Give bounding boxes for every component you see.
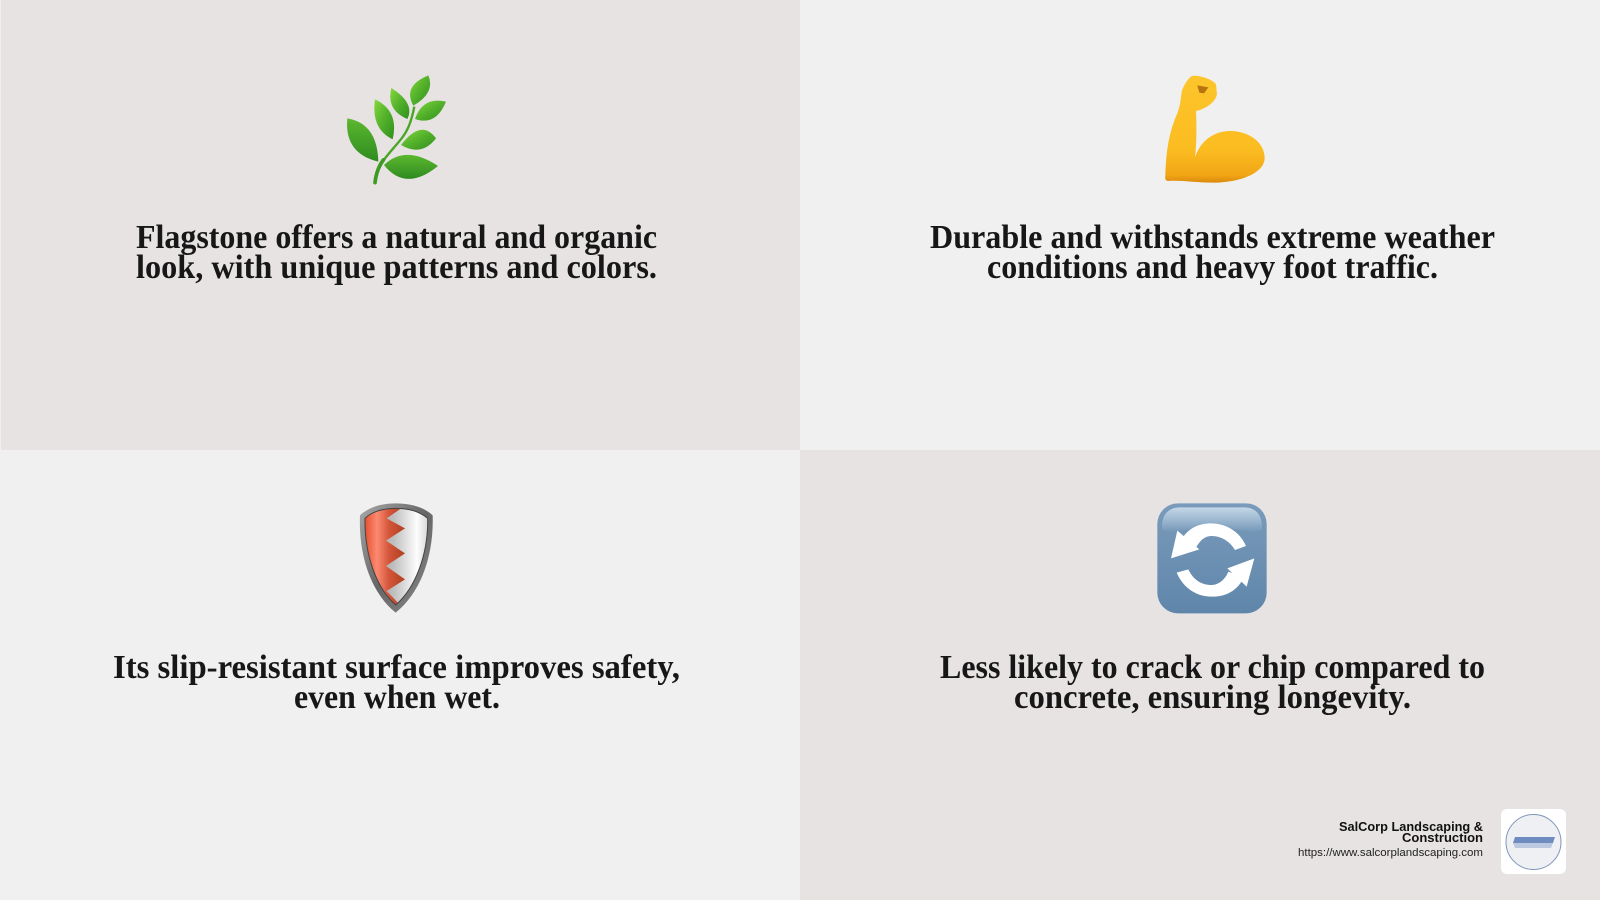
text: longevity: concrete, ensuring longevity.: [1014, 679, 1411, 716]
panel: slip resistance: [114, 503, 679, 708]
text: slip resistance: Its slip-resistant surface improves safety,: [113, 649, 680, 686]
text: slip resistance: even when wet.: [294, 679, 500, 716]
panel: durability: [800, 0, 1600, 450]
company name: SalCorp Landscaping &: [1339, 820, 1483, 834]
panel: natural look: [1, 0, 800, 450]
text: natural look: look, with unique patterns and colors.: [136, 249, 657, 286]
text: longevity: Less likely to crack or chip compared to: [940, 649, 1485, 686]
company url: https://www.salcorplandscaping.com: [1298, 847, 1483, 859]
company name: Construction: [1402, 831, 1483, 845]
company credit: [1298, 809, 1566, 874]
logo: [1501, 809, 1566, 874]
text: durability: conditions and heavy foot traffic.: [987, 249, 1438, 286]
icon: shield: [357, 503, 433, 613]
text: durability: Durable and withstands extreme weather: [930, 219, 1495, 256]
icon: refresh arrows: [1157, 503, 1267, 613]
icon: flexed biceps: [1165, 76, 1265, 183]
panel: longevity: [800, 450, 1600, 900]
icon: herb sprig: [347, 75, 446, 183]
text: natural look: Flagstone offers a natural and organic: [136, 219, 657, 256]
